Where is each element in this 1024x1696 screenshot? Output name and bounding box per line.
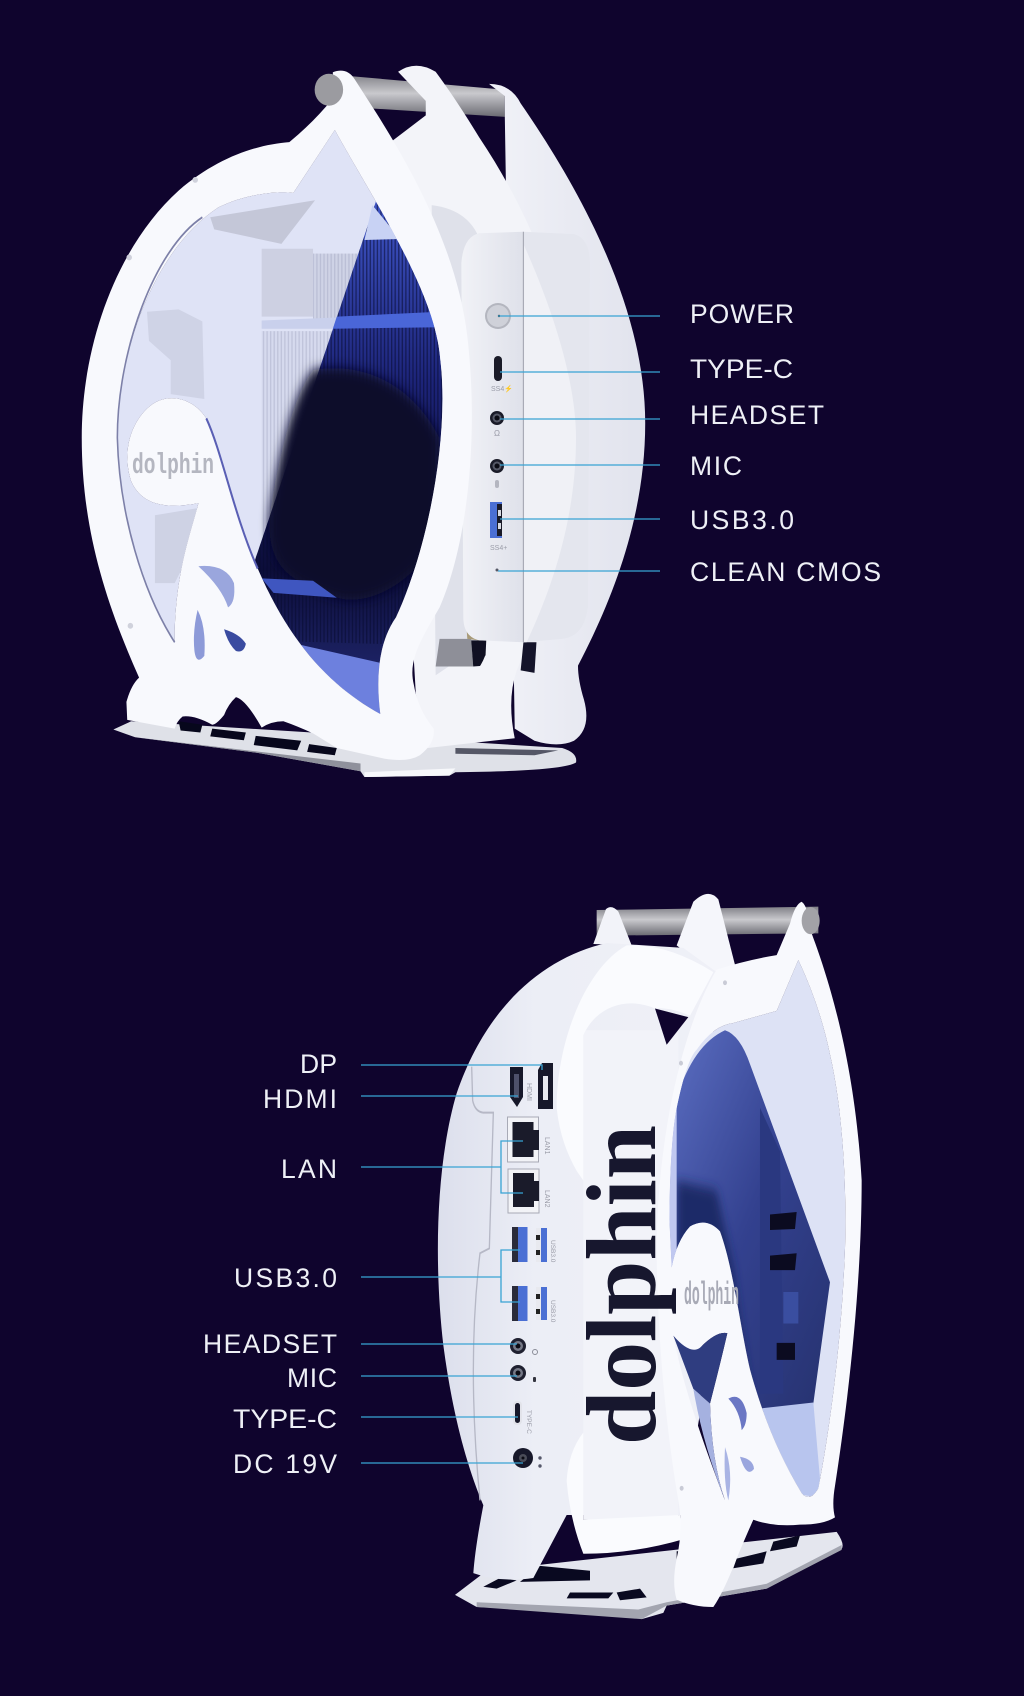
callout: headset: HEADSET	[203, 1329, 337, 1359]
front plate with window cut-out	[657, 902, 862, 1607]
headset jack: Ω	[494, 429, 500, 438]
rear body with foot	[438, 943, 717, 1580]
internal body behind front plate	[418, 205, 536, 729]
rear tab	[593, 907, 632, 945]
callout: type-c: TYPE-C	[233, 1404, 337, 1434]
type-c port	[491, 356, 513, 393]
callout: power: POWER	[690, 299, 794, 329]
steel handle rod	[329, 74, 505, 117]
type-c port	[513, 1401, 532, 1434]
product: top case, front view	[82, 66, 645, 777]
lan port 1: LAN1	[543, 1137, 550, 1155]
type-c port: SS4⚡	[491, 384, 513, 393]
rotated gothic dolphin logo cut-out: dolphin	[566, 1125, 677, 1445]
callout: mic: MIC	[287, 1363, 337, 1393]
lan port 2: LAN2	[543, 1190, 550, 1208]
lower middle plate	[567, 1433, 683, 1554]
usb ports upper	[512, 1227, 556, 1263]
rear plate	[489, 84, 645, 744]
clear cmos pinhole	[496, 568, 498, 572]
top case ports and logo	[132, 303, 513, 572]
hdmi port: HDMI	[525, 1083, 532, 1101]
middle plate	[384, 66, 576, 748]
base plate	[455, 1532, 843, 1619]
callout: lan	[281, 1141, 523, 1193]
callout: lan: LAN	[281, 1154, 337, 1184]
callouts: top case ports	[498, 299, 881, 587]
callouts: bottom case ports	[203, 1049, 542, 1479]
center logo panel	[583, 1030, 678, 1520]
callout: usb3.0	[234, 1250, 520, 1302]
usb ports lower	[512, 1286, 556, 1323]
headset jack	[490, 411, 504, 438]
callout: dp	[300, 1049, 542, 1079]
mic jack	[490, 459, 504, 488]
callout: clean cmos: CLEAN CMOS	[690, 557, 881, 587]
callout: headset: HEADSET	[690, 400, 824, 430]
lan port 1	[508, 1117, 550, 1162]
front plate window interior	[118, 130, 442, 714]
dolphin logo lettering: dolphin	[132, 449, 214, 482]
usb port: SS4+	[490, 545, 507, 552]
callout: usb3.0: USB3.0	[690, 505, 794, 535]
middle arch plate	[557, 945, 713, 1181]
steel handle rod	[597, 907, 818, 936]
headset jack	[510, 1338, 538, 1354]
handle end cap	[802, 907, 820, 934]
infographic canvas: dolphin	[684, 1277, 739, 1314]
handle end cap	[315, 74, 343, 106]
middle tab	[677, 894, 735, 975]
product: bottom case, rear view	[438, 894, 862, 1619]
front plate with window cut-out	[82, 71, 472, 760]
callout: mic: MIC	[690, 451, 742, 481]
rear seams	[472, 1067, 493, 1500]
hdmi port	[510, 1067, 532, 1107]
power button	[485, 303, 511, 329]
base plate	[113, 721, 576, 777]
dc power jack	[513, 1448, 542, 1468]
front plate window interior	[663, 953, 850, 1505]
callout: hdmi: HDMI	[263, 1084, 337, 1114]
water drop cut-outs	[194, 566, 246, 660]
water drop cut-outs	[725, 1397, 754, 1500]
bottom case ports and logos	[508, 1063, 739, 1468]
mic jack	[510, 1365, 536, 1382]
usb port	[490, 502, 507, 552]
callout: dp: DP	[300, 1049, 337, 1079]
usb ports upper: USB3.0	[549, 1240, 556, 1263]
callout: dc 19v: DC 19V	[233, 1449, 337, 1479]
usb ports lower: USB3.0	[549, 1300, 556, 1323]
callout: type-c: TYPE-C	[690, 354, 793, 384]
lan port 2	[508, 1169, 550, 1213]
infographic canvas	[82, 66, 880, 1620]
callout: usb3.0: USB3.0	[234, 1263, 337, 1293]
I/O side panel	[461, 232, 590, 642]
type-c port: TYPE-C	[525, 1410, 532, 1434]
displayport port	[538, 1063, 553, 1109]
